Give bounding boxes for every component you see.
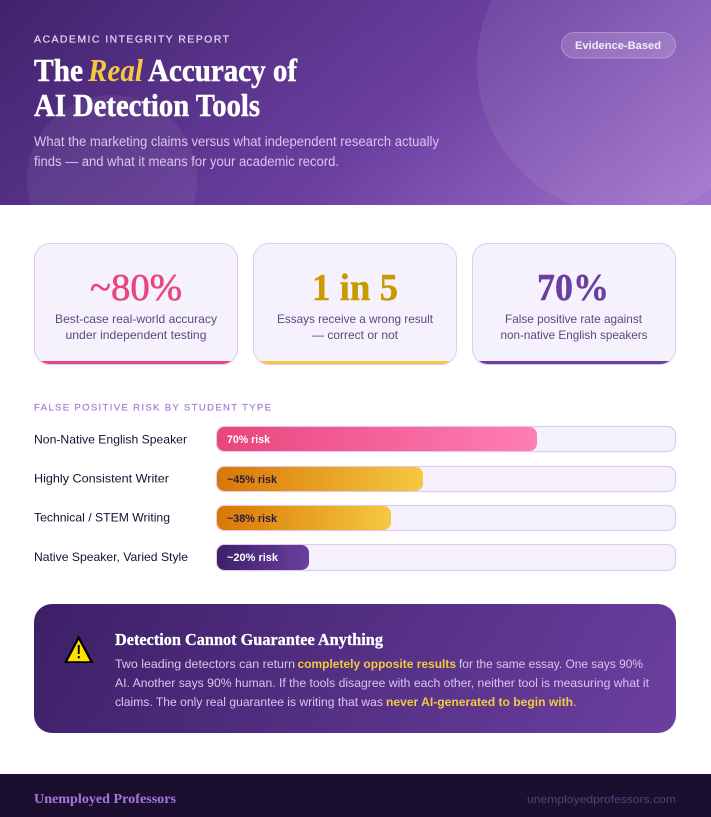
header panel <box>0 0 711 205</box>
callout body: claims. The only real guarantee is writing that was <box>115 695 383 709</box>
callout body <box>115 657 650 709</box>
stat card: 1 in 5: — correct or not <box>312 328 399 342</box>
callout panel <box>34 604 676 733</box>
footer <box>0 774 711 817</box>
stat card: 1 in 5: Essays receive a wrong result <box>277 312 434 326</box>
footer brand: Unemployed Professors <box>34 791 176 806</box>
bar: Native Speaker, Varied Style ~20% <box>34 544 676 570</box>
badge: Evidence-Based <box>562 32 676 58</box>
title: Real <box>87 52 143 88</box>
footer url: unemployedprofessors.com <box>527 794 676 806</box>
title: The <box>34 52 83 88</box>
subtitle: finds — and what it means for your academic record. <box>34 154 339 169</box>
callout body: completely opposite results <box>298 657 456 671</box>
stat card: ~80%: Best-case real-world accuracy <box>55 312 217 326</box>
stat card: 70% <box>472 244 676 365</box>
stat card: 70%: 70% <box>537 267 609 309</box>
bar: Technical / STEM Writing ~38% <box>34 506 676 530</box>
bar: Non-Native English Speaker 70% <box>34 426 676 452</box>
title: AI Detection Tools <box>34 87 260 123</box>
subtitle <box>34 134 439 169</box>
callout body: AI. Another says 90% human. If the tools disagree with each other, neither tool is measuring what it <box>115 676 650 690</box>
bar: Highly Consistent Writer ~45% <box>34 466 676 492</box>
eyebrow: ACADEMIC INTEGRITY REPORT <box>34 34 230 46</box>
stat card: 70%: non-native English speakers <box>500 328 648 342</box>
callout body: Two leading detectors can return <box>115 657 295 671</box>
bar: Non-Native English Speaker 70%: Non-Native English Speaker <box>34 432 187 446</box>
bar: Non-Native English Speaker 70%: 70% risk <box>227 434 271 446</box>
icon: warning triangle <box>64 635 94 663</box>
bar: Highly Consistent Writer ~45%: ~45% risk <box>227 474 278 486</box>
stat card: ~80%: under independent testing <box>66 328 206 342</box>
section heading: FALSE POSITIVE RISK BY STUDENT TYPE <box>34 402 271 414</box>
bar chart: risk by student type <box>34 426 676 570</box>
bar: Native Speaker, Varied Style ~20%: ~20% risk <box>227 552 279 564</box>
stat card: ~80%: ~80% <box>90 267 182 309</box>
stat card: 1 in 5 <box>253 244 457 365</box>
stat card: 70%: False positive rate against <box>505 312 643 326</box>
bar: Highly Consistent Writer ~45%: Highly Consistent Writer <box>34 472 169 486</box>
bar: Technical / STEM Writing ~38%: ~38% risk <box>227 513 278 525</box>
stat card: ~80% <box>34 244 238 365</box>
subtitle: What the marketing claims versus what independent research actually <box>34 134 439 149</box>
callout body: never AI-generated to begin with <box>386 695 573 709</box>
bar: Technical / STEM Writing ~38%: Technical / STEM Writing <box>34 510 170 524</box>
bar: Native Speaker, Varied Style ~20%: Native Speaker, Varied Style <box>34 550 188 564</box>
title <box>34 52 297 123</box>
title: Accuracy of <box>148 52 297 88</box>
badge: Evidence-Based: Evidence-Based <box>575 40 661 52</box>
callout title: Detection Cannot Guarantee Anything <box>115 630 384 649</box>
stat card: 1 in 5: 1 in 5 <box>312 267 398 309</box>
callout body: . <box>573 695 576 709</box>
callout body: for the same essay. One says 90% <box>459 657 643 671</box>
